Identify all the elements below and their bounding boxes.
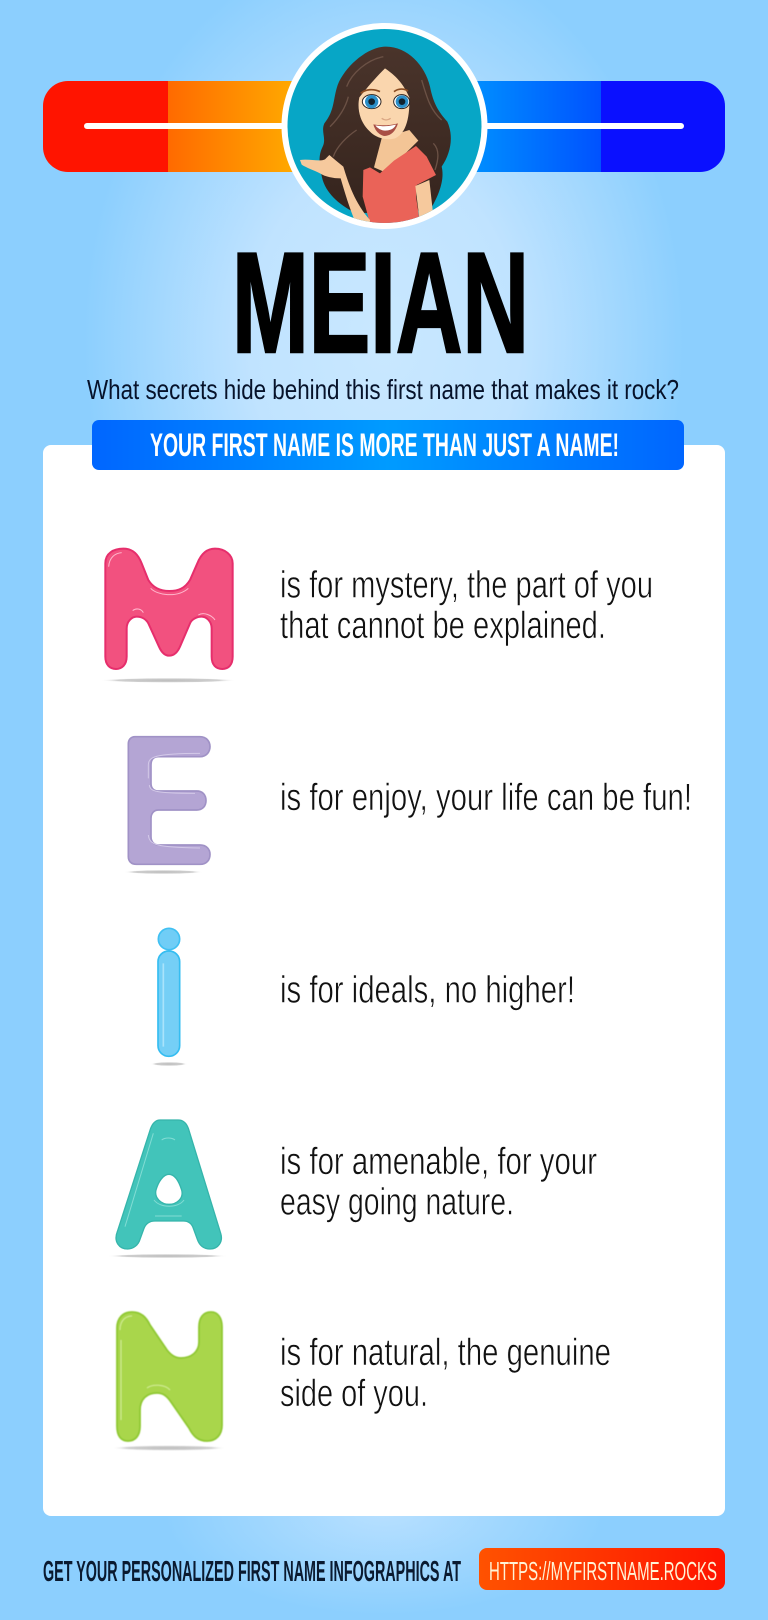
letter I: [151, 928, 187, 1066]
white content panel: [43, 445, 725, 1516]
row: N: [111, 1312, 622, 1450]
avatar portrait: [282, 23, 488, 229]
row: A: [107, 1120, 608, 1258]
letter E: [123, 737, 210, 874]
letter N: [111, 1312, 227, 1450]
text: A: is for amenable, for your: [280, 1141, 597, 1183]
letter M: [100, 549, 237, 683]
colour bar: [43, 81, 725, 172]
text: M: is for mystery, the part of you: [280, 564, 653, 606]
title: MEIAN: [232, 224, 529, 383]
footer url button: [479, 1548, 725, 1590]
text: I: is for ideals, no higher!: [280, 970, 575, 1012]
banner: [92, 420, 684, 470]
text: A: easy going nature.: [280, 1182, 514, 1224]
text: N: side of you.: [280, 1373, 428, 1415]
letter A: [107, 1120, 228, 1258]
row: M: [100, 549, 664, 683]
row: I: [151, 928, 575, 1066]
text: M: that cannot be explained.: [280, 605, 606, 647]
text: N: is for natural, the genuine: [280, 1332, 611, 1374]
row: E: [123, 737, 692, 874]
